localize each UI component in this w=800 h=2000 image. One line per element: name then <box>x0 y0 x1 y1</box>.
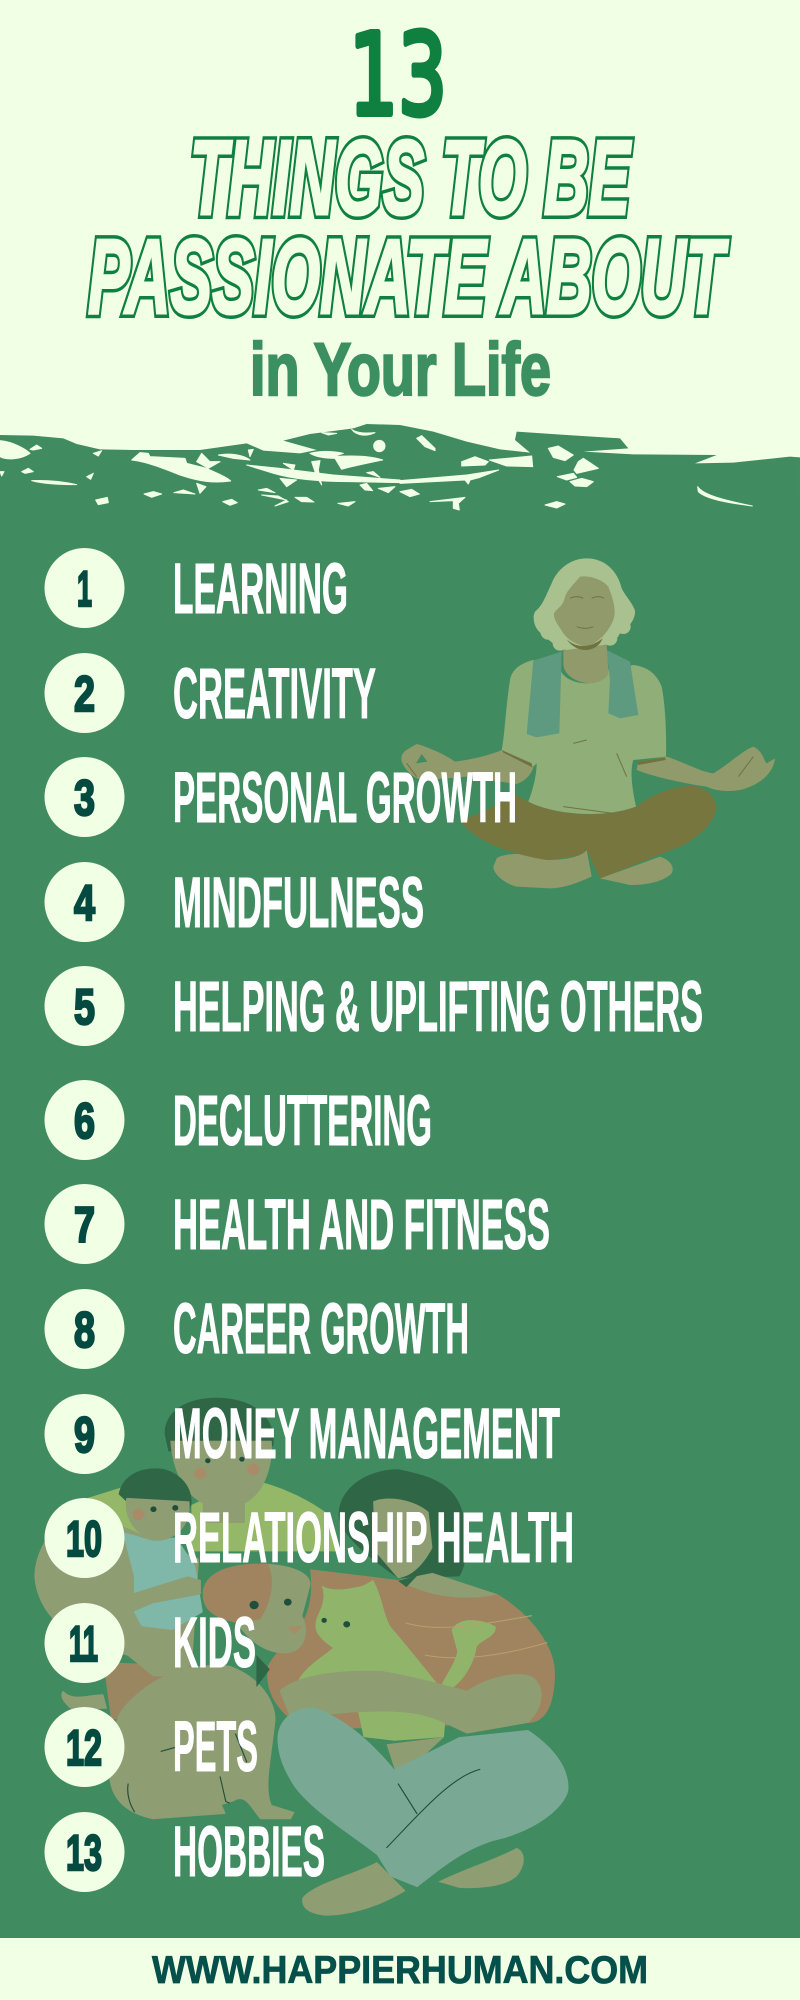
list of 13 passions: LEARNING <box>173 550 348 629</box>
item 11: kids <box>44 1603 256 1683</box>
item 13: hobbies <box>44 1812 325 1892</box>
panel: green list background <box>0 500 800 1938</box>
item 6: decluttering <box>44 1080 432 1161</box>
item 5: helping and uplifting others <box>44 966 703 1047</box>
item 2: creativity: 2 <box>74 666 95 722</box>
list of 13 passions: MINDFULNESS <box>173 864 424 943</box>
list of 13 passions: CAREER GROWTH <box>173 1290 469 1369</box>
list of 13 passions: DECLUTTERING <box>173 1082 432 1161</box>
item 9: money management <box>44 1394 560 1474</box>
item 8: career growth <box>44 1289 469 1369</box>
item 1: learning <box>44 548 348 629</box>
item 5: helping and uplifting others: 5 <box>74 979 95 1035</box>
item 12: pets: 12 <box>66 1720 102 1776</box>
item 2: creativity <box>44 653 376 734</box>
list of 13 passions: KIDS <box>173 1604 256 1683</box>
illustration: family with pets <box>34 1398 568 1916</box>
illustration: meditating woman <box>401 558 775 888</box>
item 11: kids: 11 <box>69 1616 98 1672</box>
item 13: hobbies: 13 <box>66 1825 102 1881</box>
item 3: personal growth <box>44 757 517 838</box>
item 9: money management: 9 <box>74 1407 95 1463</box>
item 1: learning: 1 <box>77 561 92 617</box>
torn wave edge <box>0 424 800 520</box>
item 3: personal growth: 3 <box>74 770 95 826</box>
item 12: pets <box>44 1707 258 1787</box>
list of 13 passions: CREATIVITY <box>173 655 376 734</box>
footer website url: WWW.HAPPIERHUMAN.COM <box>152 1949 648 1992</box>
item 4: mindfulness: 4 <box>74 875 95 931</box>
item 7: health and fitness <box>44 1184 550 1265</box>
subtitle: in your life: in Your Life <box>250 328 551 411</box>
title: 13: 13 <box>349 11 447 141</box>
list of 13 passions <box>44 548 703 1892</box>
item 8: career growth: 8 <box>74 1302 95 1358</box>
item 7: health and fitness: 7 <box>74 1197 95 1253</box>
item 10: relationship health <box>44 1498 574 1578</box>
list of 13 passions: PETS <box>173 1708 258 1787</box>
list of 13 passions: HOBBIES <box>173 1813 325 1892</box>
item 10: relationship health: 10 <box>66 1511 102 1567</box>
item 4: mindfulness <box>44 862 424 943</box>
item 6: decluttering: 6 <box>74 1093 95 1149</box>
